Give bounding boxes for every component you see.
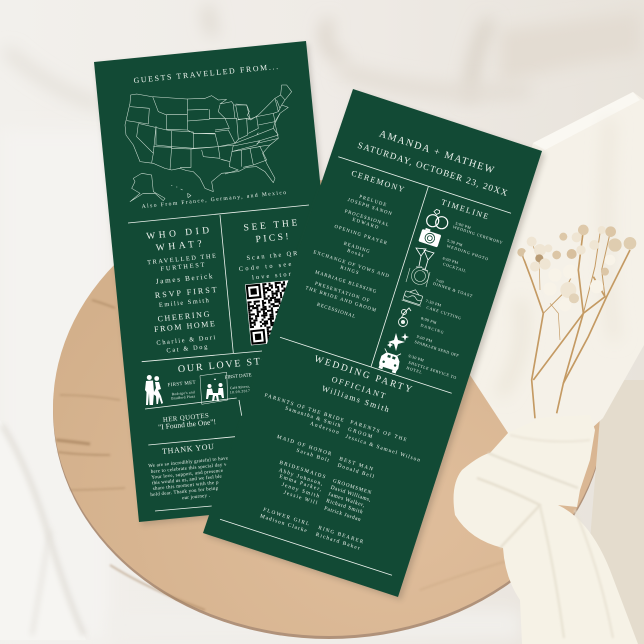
divider: above love story <box>142 351 262 362</box>
text block: wedding party: Jessica & Samuel Wilson <box>345 434 421 464</box>
beige cloth at right <box>590 380 644 644</box>
text block: first met: Bradford Plaza <box>171 394 196 401</box>
divider: love story stub <box>239 400 242 416</box>
text block: wedding party: James Walker, <box>327 491 366 509</box>
divider: ceremony and timeline <box>371 187 428 367</box>
panel: left card (guests, who did what, pics, love story) <box>94 41 354 525</box>
text block: wedding party: Emma Parker, <box>278 474 323 493</box>
text block: wedding party: Williams Smith <box>321 384 390 414</box>
text block: timeline: TIMELINE <box>440 197 490 221</box>
text block: wedding party: Madison Clarke <box>259 513 308 534</box>
text block: ceremony: Books <box>346 249 364 259</box>
text block: timeline <box>406 197 503 380</box>
text block: see the pics: Scan the QR <box>246 250 298 262</box>
text block: who did what: CHEERING <box>157 309 210 324</box>
heading: guests travelled: GUESTS TRAVELLED FROM... <box>133 62 278 85</box>
text block: first date: 10.09.2017 <box>230 389 250 395</box>
text block: ceremony: PRELUDE <box>358 195 387 208</box>
text block: who did what: FURTHEST <box>160 262 205 273</box>
text block: timeline: 6:00 PM <box>442 255 459 265</box>
text block: wedding party: David Williams, <box>330 485 372 504</box>
text block: wedding party: Donald Bell <box>337 463 375 480</box>
map: outline of the United States with state borders <box>125 85 292 202</box>
text block: wedding party: Richard Baker <box>315 532 361 552</box>
wooden serving board <box>53 180 605 639</box>
text block: who did what: FROM HOME <box>154 319 215 334</box>
panel: right card (names, ceremony, timeline, wedding party) <box>203 89 545 600</box>
text block: thank-you message: Your love, support, and presence <box>151 469 223 481</box>
text block: timeline: SHUTTLE SERVICE TO <box>408 360 457 380</box>
text block: timeline: SPARKLER SEND OFF <box>414 339 460 358</box>
divider: above thank you <box>148 437 235 445</box>
text block: ceremony: THE BRIDE AND GROOM <box>304 286 377 314</box>
text block: thank-you message: hold dear. Thank you for being <box>150 486 219 498</box>
text block: wedding party: Samantha & Smith <box>284 406 341 429</box>
text block: wedding party: GROOMSMEN <box>332 478 372 496</box>
divider: bottom <box>155 506 212 511</box>
map: Alaska <box>130 173 165 202</box>
knot <box>454 415 638 644</box>
text block: ceremony: PROCESSIONAL <box>344 209 389 228</box>
text block: timeline: HOTEL <box>406 365 423 375</box>
heading: date: SATURDAY, OCTOBER 23, 20XX <box>356 140 509 198</box>
text block: timeline: 7:00 <box>435 277 444 284</box>
text block: wedding party: Jessie Will <box>283 490 318 506</box>
text block: thank-you message: our journey . <box>182 494 210 501</box>
text block: ceremony: PRESENTATION OF <box>314 282 370 304</box>
text block: first met: Rodrigo's and <box>172 390 195 396</box>
icon: sparkles <box>387 333 409 351</box>
text block: ceremony: READING <box>343 242 371 255</box>
divider: below date <box>338 157 511 213</box>
divider: above wedding party <box>280 337 452 393</box>
text block: timeline: 9:30 PM <box>408 353 425 363</box>
text block: who did what: TRAVELLED THE <box>147 253 216 266</box>
icon: dinner plate <box>406 268 430 287</box>
heading: couple names: AMANDA + MATHEW <box>378 129 496 176</box>
text block: wedding party: BRIDESMAIDS <box>279 460 326 480</box>
heading: thank you: THANK YOU <box>162 442 215 456</box>
icon: wedding rings <box>427 210 448 229</box>
text block: ceremony: EDWARD <box>352 218 379 231</box>
divider: vertical <box>220 215 233 353</box>
icon: camera <box>418 227 442 247</box>
text block: wedding party: BEST MAN <box>338 456 374 473</box>
text block: who did what <box>146 226 217 354</box>
text block: wedding party: Abby Johnson, <box>278 467 324 488</box>
text block: who did what: Emilie Smith <box>159 297 210 309</box>
text block: wedding party: WEDDING PARTY <box>313 354 413 395</box>
text block: first date: Café Rivera, <box>230 384 250 391</box>
divider: bottom <box>220 519 392 575</box>
text block: wedding party: Sarah Bolt <box>296 448 330 464</box>
text block: see the pics: love story <box>252 270 297 281</box>
icon: dancing <box>398 308 411 326</box>
text block: wedding party: PARENTS OF THE BRIDE <box>264 392 344 424</box>
text block: ceremony: JOSEPH SANON <box>347 198 393 217</box>
text block: wedding party: GROOM <box>347 427 373 440</box>
text block: first date: FIRST DATE <box>225 373 252 381</box>
map: Hawaii <box>171 186 191 198</box>
text block: who did what: WHO DID <box>146 226 210 242</box>
text block: timeline: WEDDING PHOTO <box>446 243 489 261</box>
text block: who did what: WHAT? <box>155 239 202 254</box>
text block: thank-you message: this would us us, and we feel ble <box>152 475 222 486</box>
icon: couple silhouette standing <box>145 375 163 405</box>
text block: her quotes: "I Found the One"! <box>158 417 216 432</box>
text block: ceremony: MARRIAGE BLESSING <box>314 270 377 295</box>
text block: thank-you message: here to celebrate this special day w <box>151 463 228 475</box>
bottom-left fold of white cloth <box>0 420 86 640</box>
text block: who did what: Charlie & Dori <box>156 334 216 347</box>
text block: wedding party: Anderson <box>309 421 340 436</box>
text block: ceremony <box>304 169 406 320</box>
text block: timeline: 9:00 PM <box>416 334 433 344</box>
heading: our love story: OUR LOVE STORY <box>178 354 286 375</box>
text block: timeline: 5:00 PM <box>455 220 472 230</box>
icon: champagne glasses <box>416 248 434 271</box>
text block: timeline: 8:00 PM <box>420 315 438 325</box>
text block: thank-you message: share this moment with the p <box>153 481 219 492</box>
text block: wedding party <box>259 354 421 552</box>
text block: thank-you message: We are so incredibly grateful to have <box>148 456 228 469</box>
dried baby's breath sprig <box>517 225 636 418</box>
text block: first met: FIRST MET <box>167 381 196 388</box>
text block: ceremony: RECESSIONAL <box>316 303 356 320</box>
text block: ceremony: CEREMONY <box>350 169 406 194</box>
text block: wedding party: MAID OF HONOR <box>276 434 333 458</box>
text block: who did what: Cat & Dog <box>166 343 208 354</box>
text block: first date <box>225 373 252 395</box>
text block: wedding party: RING BEARER <box>317 525 364 545</box>
text block: who did what: RSVP FIRST <box>154 285 217 300</box>
caption: also from: Also From France, Germany, and Mexico <box>141 190 287 210</box>
text block: see the pics <box>239 218 312 281</box>
text block: wedding party: Richard Smith <box>325 498 364 516</box>
text block: ceremony: RINGS <box>339 266 359 276</box>
divider: below love story <box>145 398 237 409</box>
text block: ceremony: EXCHANGE OF VOWS AND <box>313 250 390 280</box>
text block: first met <box>167 381 196 401</box>
text block: see the pics: SEE THE <box>243 218 298 234</box>
text block: wedding party: PARENTS OF THE <box>349 419 407 443</box>
text block: timeline: DINNER & TOAST <box>432 281 474 298</box>
text block: see the pics: Code to see our <box>239 259 312 273</box>
text block: ceremony: OPENING PRAYER <box>334 225 388 247</box>
icon: cake <box>402 287 425 306</box>
text block: timeline: CAKE CUTTING <box>426 305 462 321</box>
text block: timeline: COCKTAIL <box>442 261 467 274</box>
text block: her quotes: HER QUOTES <box>163 412 209 424</box>
text block: timeline: 7:30 PM <box>425 298 442 308</box>
text block: wedding party: Patrick Jordan <box>323 506 362 523</box>
text block: timeline: 5:30 PM <box>446 238 464 248</box>
text block: wedding party: Jenny Smith <box>281 482 320 500</box>
text block: timeline: DANCING <box>420 322 444 335</box>
white napkin with knot <box>454 92 644 644</box>
divider: below map <box>128 205 309 223</box>
QR code <box>245 278 312 345</box>
text block: who did what: James Berick <box>155 272 213 286</box>
text block: see the pics: PICS! <box>255 232 289 245</box>
text block: wedding party: FLOWER GIRL <box>262 507 310 527</box>
icon: couple at dinner table in box <box>200 372 228 404</box>
text block: timeline: WEDDING CEREMONY <box>452 224 503 245</box>
icon: getaway car <box>378 348 403 374</box>
text block: wedding party: OFFICIANT <box>330 375 387 401</box>
text block: thank-you message <box>148 456 228 501</box>
